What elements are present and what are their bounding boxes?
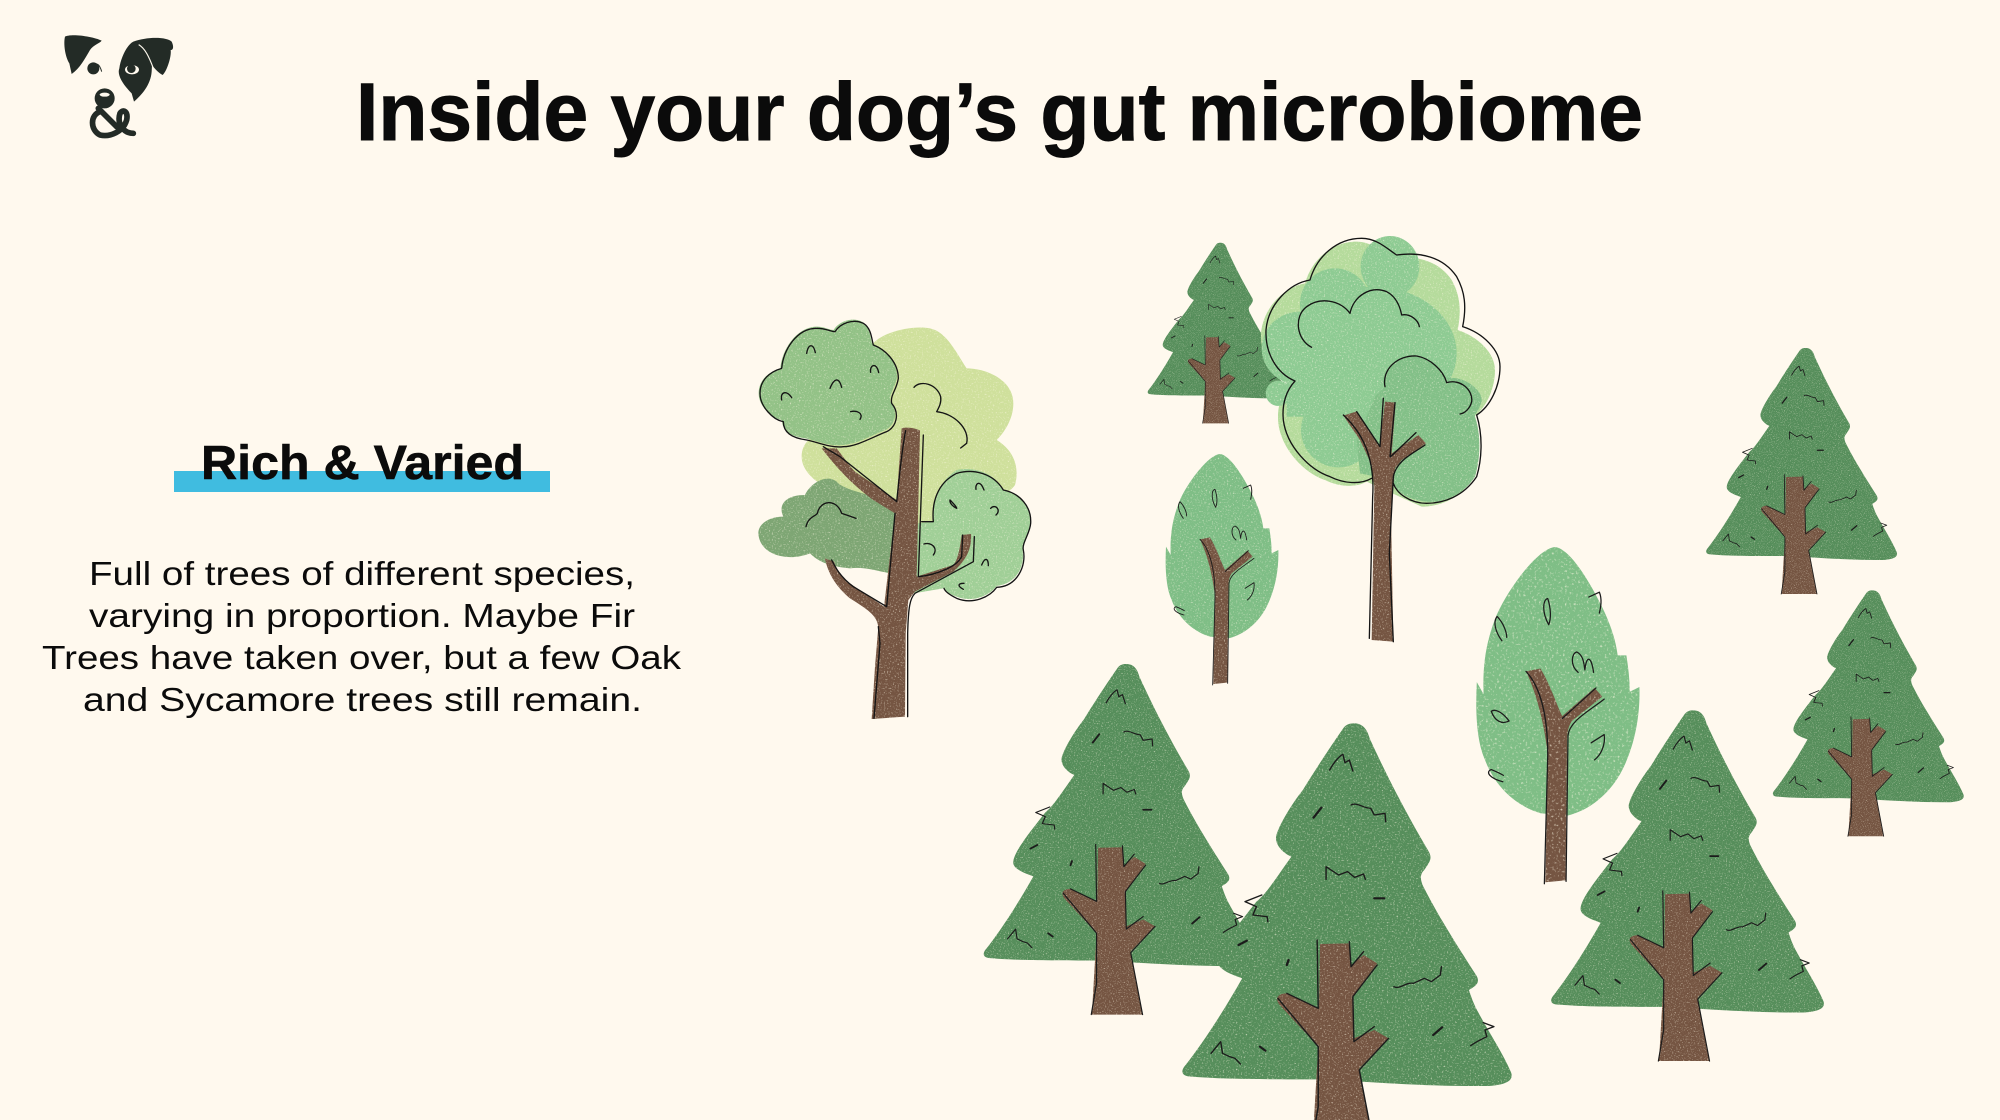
body text block: Trees have taken over, but a few Oak bbox=[42, 639, 682, 676]
tree: small cypress bbox=[1166, 454, 1278, 685]
tree: round oak bbox=[1261, 236, 1500, 642]
tree: mixed-canopy sycamore bbox=[758, 320, 1031, 719]
tree: small fir top left bbox=[1148, 243, 1287, 423]
tree: large fir left bbox=[984, 664, 1257, 1015]
body text block: Full of trees of different species, bbox=[89, 555, 635, 592]
tree: fir upper right bbox=[1706, 348, 1897, 594]
title: Inside your dog’s gut microbiome bbox=[356, 67, 1643, 158]
body text block: varying in proportion. Maybe Fir bbox=[89, 597, 635, 634]
tree: largest fir front bbox=[1182, 723, 1512, 1120]
body text block bbox=[42, 555, 682, 718]
logo: dog face with ampersand bbox=[64, 35, 173, 136]
tree: fir lower right bbox=[1551, 710, 1824, 1061]
body text block: and Sycamore trees still remain. bbox=[83, 681, 642, 718]
heading with blue highlight: Rich & Varied bbox=[201, 437, 524, 490]
tree: fir middle right bbox=[1773, 590, 1964, 836]
tree: large cypress bbox=[1476, 547, 1640, 884]
